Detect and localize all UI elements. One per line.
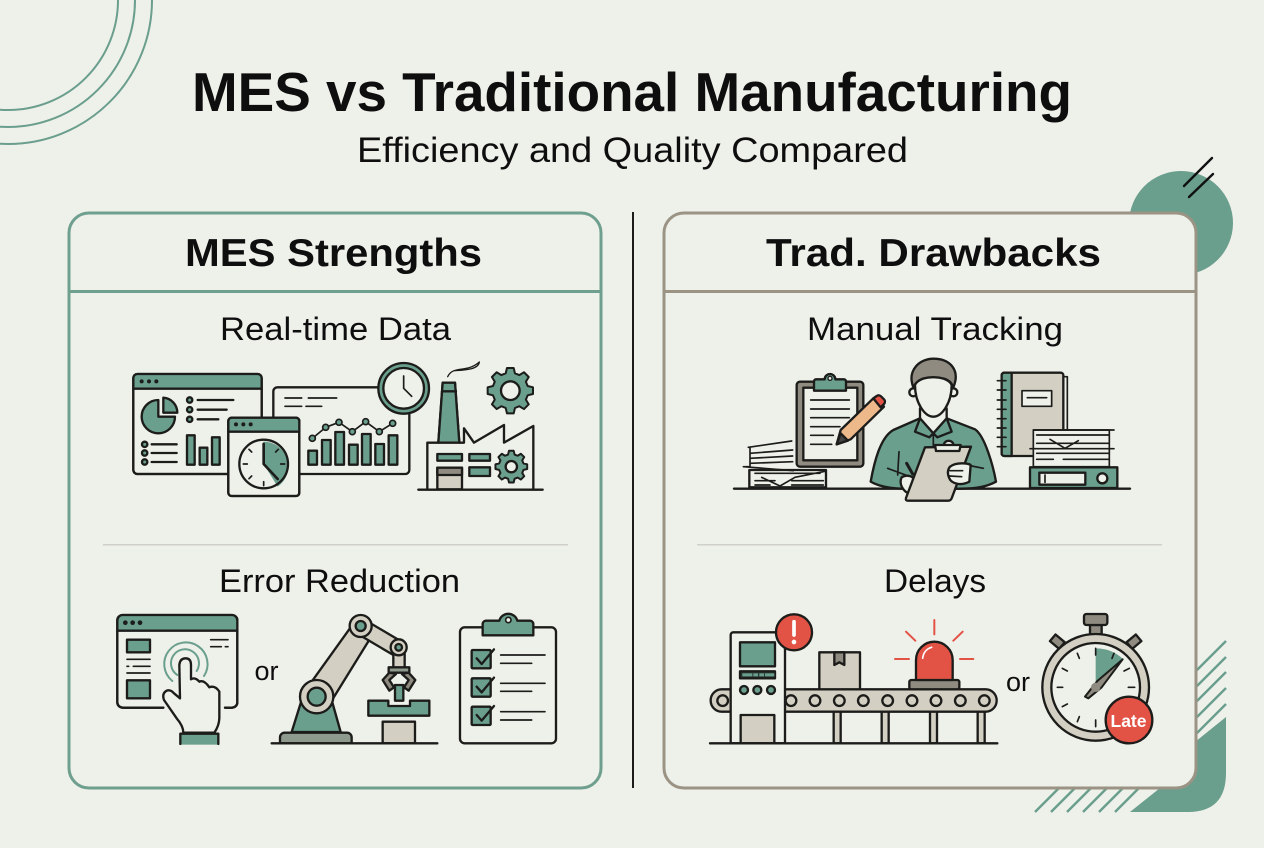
- decoration: bottom-right corner shape: [1035, 641, 1226, 812]
- illustration: late stopwatch: [1042, 614, 1152, 743]
- illustration: delayed conveyor: [710, 614, 997, 743]
- title: MES vs Traditional Manufacturing: [192, 61, 1072, 123]
- panel: traditional drawbacks: [664, 213, 1196, 788]
- text: or: or: [254, 656, 279, 686]
- badge text: Late: Late: [1111, 711, 1147, 731]
- illustration: robot arm: [272, 615, 437, 743]
- subheading: Real-time Data: Real-time Data: [220, 311, 451, 347]
- illustration: dashboards and factory: [133, 362, 543, 496]
- panel: MES strengths: [69, 213, 601, 788]
- subtitle: Efficiency and Quality Compared: [357, 131, 908, 170]
- decoration: corner arcs: [0, 0, 152, 144]
- text: or: or: [1006, 667, 1030, 697]
- illustration: manual tracking worker: [734, 359, 1130, 501]
- subheading: Error Reduction: Error Reduction: [219, 563, 460, 599]
- illustration: touch screen: [117, 615, 237, 745]
- decoration: teal circle: [1129, 158, 1233, 275]
- subheading: Manual Tracking: Manual Tracking: [807, 311, 1063, 347]
- heading: Trad. Drawbacks: Trad. Drawbacks: [766, 232, 1101, 275]
- subheading: Delays: Delays: [884, 563, 986, 599]
- centre divider: [632, 212, 634, 788]
- illustration: checklist clipboard: [460, 614, 556, 743]
- heading: MES Strengths: MES Strengths: [185, 232, 482, 275]
